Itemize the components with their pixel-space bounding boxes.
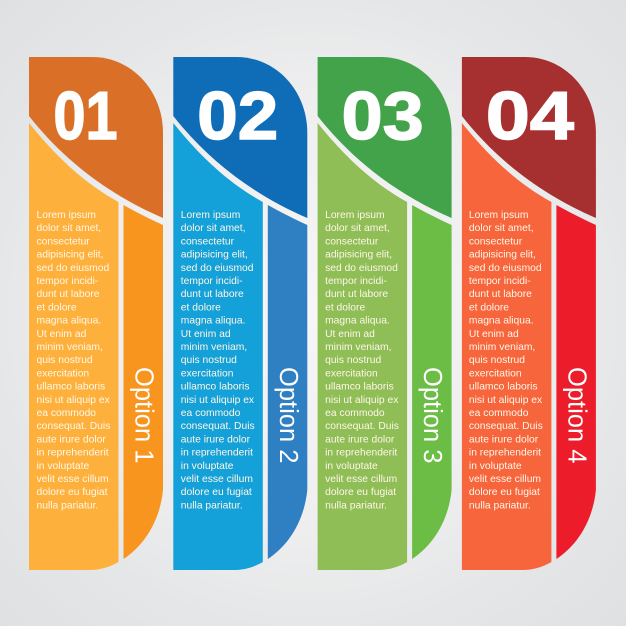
- body text 1: magna aliqua.: [36, 316, 101, 327]
- body text 2: quis nostrud: [181, 355, 237, 366]
- body text 3: quis nostrud: [325, 355, 381, 366]
- body text 1: in reprehenderit: [36, 448, 109, 459]
- body text 2: magna aliqua.: [181, 316, 245, 327]
- text column shape 3: [318, 123, 407, 570]
- body text 4: magna aliqua.: [469, 316, 534, 327]
- body text 3: dunt ut labore: [325, 289, 388, 300]
- body text 3: nisi ut aliquip ex: [325, 395, 399, 406]
- option label 4: Option 4: [562, 367, 590, 463]
- body text 4: nisi ut aliquip ex: [469, 395, 543, 406]
- body text 3: Lorem ipsum: [325, 210, 385, 221]
- body text 2: ea commodo: [181, 408, 241, 419]
- text column shape 4: [462, 123, 551, 570]
- body text 4: aute irure dolor: [469, 434, 539, 445]
- body text 2: dolor sit amet,: [181, 223, 245, 234]
- body text 3: adipisicing elit,: [325, 250, 392, 261]
- body text 3: ea commodo: [325, 408, 385, 419]
- body text 4: consectetur: [469, 236, 523, 247]
- body text 4: in reprehenderit: [469, 448, 541, 459]
- body text 2: consectetur: [181, 236, 235, 247]
- text column shape 2: [173, 123, 263, 570]
- body text 3: dolore eu fugiat: [325, 487, 396, 498]
- body text 1: ea commodo: [36, 408, 96, 419]
- body text 2: consequat. Duis: [181, 421, 255, 432]
- body text 4: nulla pariatur.: [469, 500, 531, 511]
- option column shape 1: [124, 205, 163, 559]
- number 02: 02: [197, 78, 278, 154]
- body text 3: aute irure dolor: [325, 434, 395, 445]
- option label 1: Option 1: [130, 367, 158, 463]
- header shape 2: [173, 57, 307, 218]
- body text 2: dunt ut labore: [181, 289, 244, 300]
- body text 2: ullamco laboris: [181, 382, 249, 393]
- body text 3: in reprehenderit: [325, 448, 397, 459]
- body text 1: tempor incidi-: [36, 276, 98, 287]
- body text 2: et dolore: [181, 302, 221, 313]
- body text 4: dolore eu fugiat: [469, 487, 540, 498]
- body text 2: velit esse cillum: [181, 474, 253, 485]
- body text 2: Lorem ipsum: [181, 210, 240, 221]
- body text 4: et dolore: [469, 302, 509, 313]
- body text 3: velit esse cillum: [325, 474, 397, 485]
- body text 1: exercitation: [36, 368, 89, 379]
- body text 3: dolor sit amet,: [325, 223, 390, 234]
- body text 4: Ut enim ad: [469, 329, 519, 340]
- body text 3: ullamco laboris: [325, 382, 394, 393]
- body text 1: adipisicing elit,: [36, 250, 103, 261]
- header shape 1: [29, 57, 163, 218]
- body text 2: dolore eu fugiat: [181, 487, 252, 498]
- option label 3: Option 3: [418, 367, 446, 463]
- body text 1: ullamco laboris: [36, 382, 105, 393]
- body text 4: minim veniam,: [469, 342, 535, 353]
- body text 4: adipisicing elit,: [469, 250, 536, 261]
- body text 3: sed do eiusmod: [325, 263, 398, 274]
- body text 1: Ut enim ad: [36, 329, 87, 340]
- body text 2: nisi ut aliquip ex: [181, 395, 255, 406]
- body text 4: consequat. Duis: [469, 421, 543, 432]
- body text 3: et dolore: [325, 302, 365, 313]
- body text 1: sed do eiusmod: [36, 263, 109, 274]
- body text 4: exercitation: [469, 368, 522, 379]
- body text 1: quis nostrud: [36, 355, 93, 366]
- body text 1: et dolore: [36, 302, 77, 313]
- body text 3: magna aliqua.: [325, 316, 390, 327]
- body text 4: dolor sit amet,: [469, 223, 534, 234]
- body text 2: in voluptate: [181, 461, 234, 472]
- body text 4: in voluptate: [469, 461, 522, 472]
- text column shape 1: [29, 123, 118, 570]
- panel: option 2: [173, 57, 307, 570]
- body text 4: quis nostrud: [469, 355, 525, 366]
- panel: option 1: [29, 57, 163, 570]
- option column shape 4: [556, 205, 596, 559]
- body text 1: nisi ut aliquip ex: [36, 395, 111, 406]
- option label 2: Option 2: [274, 367, 302, 463]
- body text 3: in voluptate: [325, 461, 378, 472]
- body text 2: minim veniam,: [181, 342, 247, 353]
- body text 4: velit esse cillum: [469, 474, 541, 485]
- body text 1: aute irure dolor: [36, 434, 106, 445]
- body text 1: minim veniam,: [36, 342, 103, 353]
- body text 2: exercitation: [181, 368, 234, 379]
- body text 4: sed do eiusmod: [469, 263, 542, 274]
- header shape 3: [318, 57, 452, 218]
- body text 1: dolor sit amet,: [36, 223, 101, 234]
- header shape 4: [462, 57, 596, 218]
- body text 2: adipisicing elit,: [181, 250, 248, 261]
- body text 1: consectetur: [36, 236, 90, 247]
- number 04: 04: [486, 78, 574, 154]
- body text 2: in reprehenderit: [181, 448, 253, 459]
- body text 3: nulla pariatur.: [325, 500, 387, 511]
- body text 4: dunt ut labore: [469, 289, 532, 300]
- body text 3: consequat. Duis: [325, 421, 399, 432]
- option column shape 3: [412, 205, 452, 559]
- body text 1: nulla pariatur.: [36, 500, 98, 511]
- body text 2: Ut enim ad: [181, 329, 231, 340]
- number 03: 03: [342, 78, 424, 154]
- body text 2: tempor incidi-: [181, 276, 243, 287]
- panel: option 4: [462, 57, 596, 570]
- panel: option 3: [318, 57, 452, 570]
- body text 1: dunt ut labore: [36, 289, 100, 300]
- option column shape 2: [268, 205, 307, 559]
- body text 1: Lorem ipsum: [36, 210, 96, 221]
- body text 4: ullamco laboris: [469, 382, 538, 393]
- body text 1: velit esse cillum: [36, 474, 109, 485]
- body text 4: ea commodo: [469, 408, 529, 419]
- body text 3: Ut enim ad: [325, 329, 375, 340]
- body text 4: Lorem ipsum: [469, 210, 528, 221]
- body text 3: minim veniam,: [325, 342, 391, 353]
- body text 2: aute irure dolor: [181, 434, 251, 445]
- body text 3: consectetur: [325, 236, 379, 247]
- body text 1: dolore eu fugiat: [36, 487, 108, 498]
- body text 2: sed do eiusmod: [181, 263, 254, 274]
- body text 2: nulla pariatur.: [181, 500, 243, 511]
- body text 1: in voluptate: [36, 461, 89, 472]
- number 01: 01: [54, 78, 118, 154]
- body text 3: tempor incidi-: [325, 276, 387, 287]
- body text 1: consequat. Duis: [36, 421, 110, 432]
- body text 4: tempor incidi-: [469, 276, 531, 287]
- body text 3: exercitation: [325, 368, 378, 379]
